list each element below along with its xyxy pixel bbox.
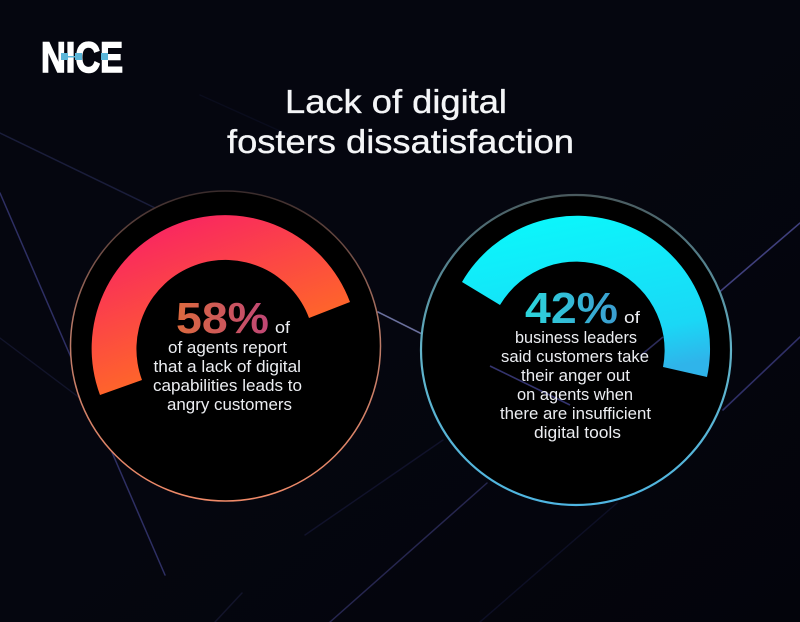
description: business leaders: said customers take [501, 347, 649, 366]
panel: 42% gauge [421, 195, 731, 505]
description: agents [153, 338, 302, 414]
logo: NICE: NICE [41, 34, 123, 82]
description: business leaders: digital tools [534, 423, 621, 442]
panel: 58% gauge [70, 191, 380, 501]
title: fosters dissatisfaction [227, 123, 574, 160]
gauge arc: 58% [92, 215, 350, 395]
statistic: 58%: 58% [176, 294, 269, 343]
description: business leaders [500, 328, 651, 442]
label: of: of [275, 318, 290, 337]
description: business leaders: their anger out [521, 366, 630, 385]
description: agents: that a lack of digital [154, 357, 301, 376]
label: of: of [624, 308, 640, 327]
statistic: 42%: 42% [525, 284, 618, 333]
description: business leaders: business leaders [515, 328, 637, 347]
description: business leaders: on agents when [517, 385, 633, 404]
ring: left gauge outline [70, 191, 380, 501]
description: agents: of agents report [168, 338, 287, 357]
title [227, 83, 574, 160]
ring: right gauge outline [421, 195, 731, 505]
description: agents: capabilities leads to [153, 376, 302, 395]
title: Lack of digital [285, 83, 507, 120]
description: agents: angry customers [167, 395, 292, 414]
gauge arc: 42% [462, 216, 710, 377]
description: business leaders: there are insufficient [500, 404, 651, 423]
